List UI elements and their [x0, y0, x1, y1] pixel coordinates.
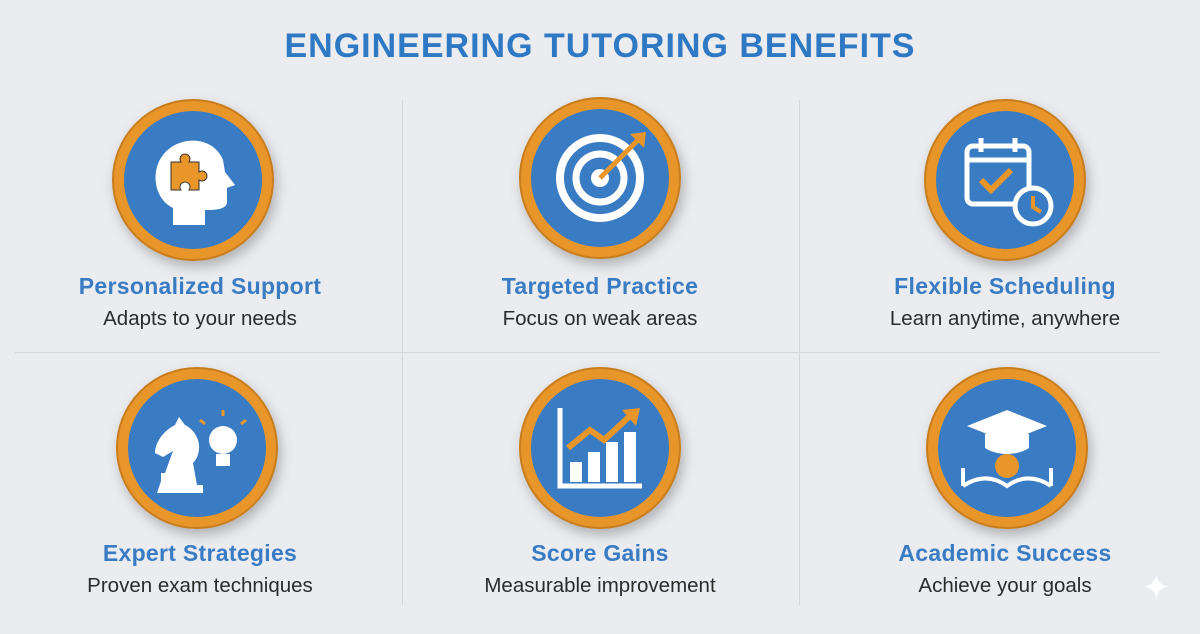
text: academic success: Achieve your goals [918, 574, 1092, 597]
text: score gains: Score Gains [531, 540, 669, 566]
icon: chess knight and bulb [117, 368, 277, 528]
text: expert strategies: Proven exam techniques [87, 574, 313, 597]
text: personalized support [79, 273, 321, 330]
text: flexible scheduling [890, 273, 1120, 330]
text: score gains: Measurable improvement [484, 574, 716, 597]
text: academic success [898, 540, 1112, 597]
icon: bar chart [520, 368, 680, 528]
text: targeted practice [502, 273, 698, 330]
text: academic success: Academic Success [898, 540, 1112, 566]
text: targeted practice: Focus on weak areas [503, 307, 697, 330]
icon: graduation cap book [927, 368, 1087, 528]
text: flexible scheduling: Flexible Scheduling [894, 273, 1116, 299]
text: targeted practice: Targeted Practice [502, 273, 698, 299]
title: ENGINEERING TUTORING BENEFITS [284, 27, 915, 65]
icon: calendar clock [925, 100, 1085, 260]
text: expert strategies [87, 540, 313, 597]
text: score gains [484, 540, 716, 597]
icon: head with puzzle [113, 100, 273, 260]
icon: sparkle: ✦ [1142, 569, 1170, 607]
icon: target [520, 98, 680, 258]
text: personalized support: Personalized Support [79, 273, 321, 299]
text: expert strategies: Expert Strategies [103, 540, 297, 566]
text: personalized support: Adapts to your needs [103, 307, 297, 330]
text: flexible scheduling: Learn anytime, anywhere [890, 307, 1120, 330]
